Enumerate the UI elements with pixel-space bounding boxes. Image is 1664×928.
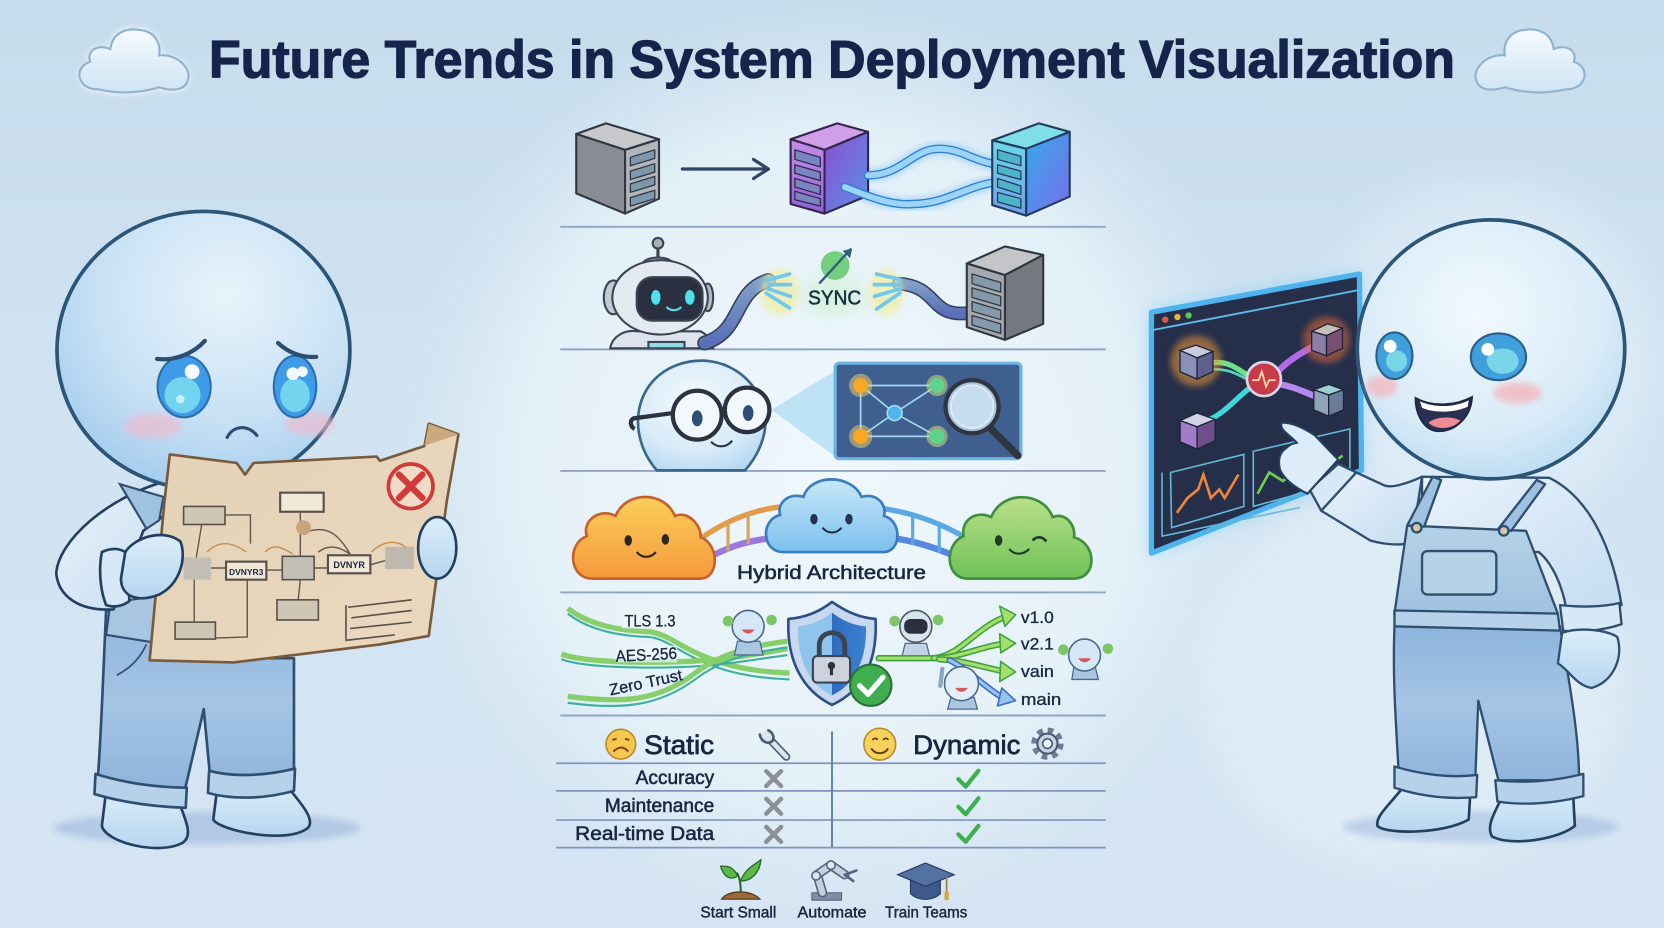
bib under arm [106, 595, 164, 643]
sparkline: orange [1177, 475, 1238, 513]
topology panel [835, 363, 1021, 459]
check marks [958, 771, 978, 842]
server cable [869, 269, 967, 315]
cloud: green [950, 497, 1091, 579]
heading: dynamic: Dynamic [913, 730, 1020, 760]
row labels: Real-time Data [575, 824, 715, 845]
dashboard [1151, 274, 1362, 553]
heading: Future Trends in System Deployment Visualization [209, 31, 1455, 90]
labels: versions: main [1021, 691, 1061, 709]
icon: left title cloud [79, 28, 190, 94]
labels: protocols [608, 612, 685, 699]
strap [120, 484, 163, 529]
row 1: server migration [576, 123, 1070, 216]
shoes [1377, 783, 1575, 841]
head [57, 211, 350, 489]
map text lines [346, 600, 412, 641]
left arm [56, 480, 175, 610]
sync glow [802, 277, 866, 315]
mascot: robot thumbs up [889, 610, 943, 656]
row labels: Maintenance [605, 796, 714, 817]
encrypted streams [561, 608, 790, 706]
icon: sad emoji [606, 729, 636, 759]
icon: magnifier [946, 380, 1018, 456]
overalls bib [1394, 477, 1560, 631]
sparkline: green [1258, 456, 1342, 494]
icon: right title cloud [1475, 29, 1585, 92]
step labels: Automate [798, 905, 866, 922]
map box labels: DVNYR3 [229, 567, 264, 577]
icon: sync [819, 249, 852, 284]
icon: dark server [967, 246, 1043, 340]
table grid [556, 731, 1106, 848]
cube nodes [1171, 316, 1350, 449]
shoes [102, 786, 310, 848]
panel: confused character with static diagram [53, 211, 458, 848]
icon: sprout [721, 860, 761, 899]
row 2: AI sync [604, 238, 1043, 348]
pants [94, 610, 295, 808]
icon: graduation cap [898, 863, 954, 900]
label: hybrid architecture: Hybrid Architecture [737, 562, 926, 584]
icon: shield [788, 602, 891, 706]
labels: protocols: AES-256 [615, 645, 678, 666]
branching arrows [879, 616, 1008, 701]
hands [121, 517, 456, 598]
map connectors [194, 513, 405, 638]
map boxes [175, 493, 414, 639]
labels: protocols: TLS 1.3 [625, 612, 675, 630]
dashboard glow [1149, 272, 1363, 555]
labels: versions: vain [1021, 663, 1054, 681]
label: SYNC: SYNC [808, 287, 861, 309]
glow cables [845, 149, 992, 204]
data flows [1210, 345, 1318, 419]
torso and arms [1321, 472, 1622, 688]
pointing hand [1279, 423, 1338, 494]
robot [604, 238, 713, 348]
face: worried [124, 341, 335, 439]
pulse hub [1247, 362, 1281, 396]
ground shadow [53, 812, 361, 844]
map: static diagram: DVNYR [333, 560, 365, 570]
title with clouds [79, 28, 1585, 94]
icon: gear [1035, 731, 1060, 756]
icon: purple server [791, 123, 868, 214]
cables [845, 149, 992, 204]
bridges [703, 506, 965, 561]
labels: versions [1021, 609, 1061, 709]
arrowheads [998, 606, 1016, 706]
mascot: lower pointing [940, 667, 978, 709]
mascot: right cheering [1058, 639, 1113, 679]
map: static diagram [150, 424, 458, 662]
row 5: security pipeline [561, 602, 1113, 709]
step labels [700, 905, 968, 922]
chart frames [1162, 429, 1350, 536]
robot cable [705, 269, 799, 343]
cross marks [766, 771, 781, 842]
sleeve cuff [1310, 464, 1356, 511]
row 4: hybrid architecture [573, 479, 1091, 584]
icon: happy emoji [864, 728, 896, 760]
step labels: Train Teams [885, 905, 968, 922]
heading: static: Static [644, 730, 714, 760]
cloud: blue [766, 479, 897, 552]
head [1357, 220, 1625, 479]
icon: wrench [760, 730, 786, 757]
row labels [575, 768, 715, 845]
labels: versions: v2.1 [1021, 636, 1054, 654]
labels: versions: v1.0 [1021, 609, 1054, 627]
panel: central roadmap [556, 123, 1113, 922]
ground shadow [1342, 811, 1618, 843]
light beam [772, 371, 835, 457]
icon: robot arm [812, 861, 856, 900]
icon: blue server [992, 123, 1070, 216]
arrow [682, 159, 768, 179]
panel: comparison table [556, 728, 1106, 848]
mascot: thumbs up left [723, 610, 777, 655]
labels: protocols: Zero Trust [608, 667, 685, 699]
icon: legacy grey server [576, 123, 659, 214]
row 3: topology viewer [631, 361, 1021, 470]
face: happy [1366, 332, 1542, 431]
step labels: Start Small [700, 905, 776, 922]
icon: red cross [388, 464, 433, 509]
panel: next steps [700, 860, 968, 922]
overalls legs [1394, 626, 1583, 804]
panel: happy character with live dashboard [1149, 220, 1625, 843]
head with glasses [631, 361, 769, 470]
row dividers [560, 227, 1106, 716]
cloud: orange [573, 497, 715, 579]
row labels: Accuracy [636, 768, 715, 789]
